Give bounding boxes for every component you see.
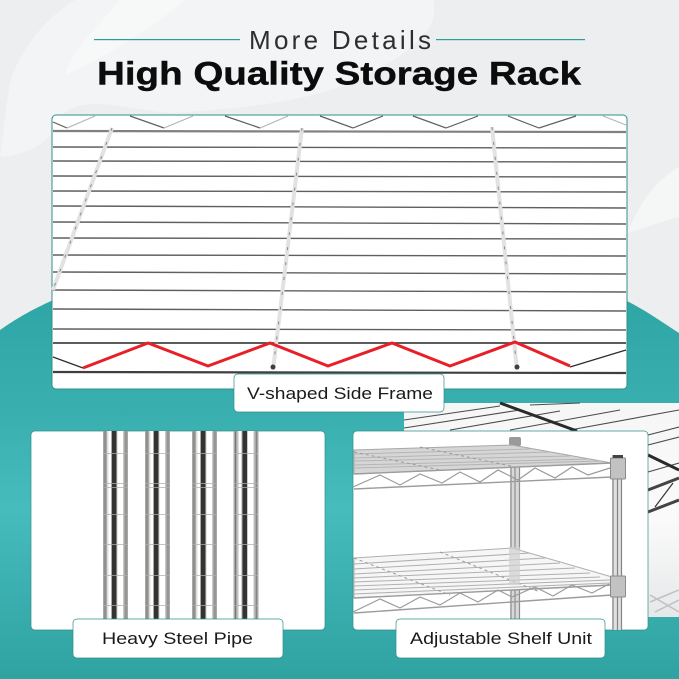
- support feet: [270, 364, 520, 370]
- label: Adjustable Shelf Unit: Adjustable Shelf Unit: [410, 629, 592, 648]
- teal lower background: [0, 301, 679, 679]
- pipe 3: [192, 431, 217, 621]
- title: High Quality Storage Rack: High Quality Storage Rack: [97, 56, 581, 92]
- label: Heavy Steel Pipe: Heavy Steel Pipe: [102, 629, 253, 648]
- lower shelf: [353, 547, 612, 613]
- upper shelf: [353, 445, 612, 489]
- eyebrow: More Details: More Details: [249, 25, 431, 55]
- panel: V-shaped side frame: [52, 115, 627, 389]
- pipe 4: [234, 431, 258, 621]
- header: [94, 25, 585, 92]
- label: V-shaped Side Frame: [234, 374, 444, 412]
- eyebrow rule, left: [94, 39, 240, 40]
- back pole: [509, 437, 521, 620]
- pipe 1: [103, 431, 128, 621]
- eyebrow rule, right: [436, 39, 585, 40]
- pipe 2: [145, 431, 170, 621]
- panel: adjustable shelf unit: [353, 431, 648, 630]
- shelf wires: [53, 131, 626, 373]
- label: Heavy Steel Pipe: [73, 619, 283, 658]
- photo: dark wire shelf behind right panel: [404, 403, 679, 617]
- label: Adjustable Shelf Unit: [396, 619, 605, 658]
- red V-frame highlight: [83, 342, 570, 368]
- cross supports: [53, 127, 517, 370]
- panel: heavy steel pipe: [31, 431, 325, 630]
- label: V-shaped Side Frame: V-shaped Side Frame: [247, 384, 433, 403]
- top zigzag: [53, 116, 626, 128]
- lower side wires: [53, 350, 626, 368]
- front pole: [610, 455, 626, 630]
